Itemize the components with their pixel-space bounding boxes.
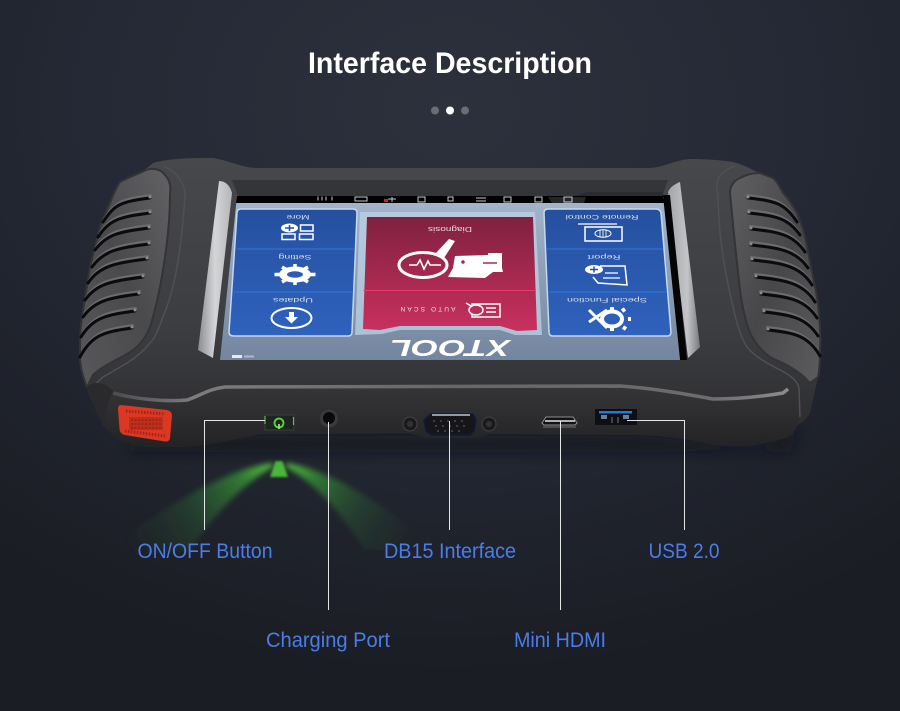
label: Mini HDMI: Mini HDMI [514, 629, 606, 652]
icon: updates: Updates [272, 296, 313, 303]
icon: setting: Setting [278, 253, 312, 260]
DB15 port [424, 414, 476, 435]
center red panel [355, 212, 542, 335]
charging port [320, 410, 338, 428]
right blue panel [544, 209, 671, 336]
top bezel [232, 180, 668, 196]
label: Charging Port: Charging Port [266, 629, 390, 652]
left grip ribs [80, 195, 152, 357]
left silver bezel [198, 181, 232, 358]
battery status [232, 355, 254, 358]
label: ON/OFF Button: ON/OFF Button [138, 540, 272, 563]
status bar [236, 192, 664, 203]
icon: remote control: Remote Control [565, 213, 638, 220]
red power bumper [118, 405, 172, 442]
icon: auto scan [466, 303, 500, 317]
text: diagnosis: Diagnosis [427, 225, 472, 232]
label: DB15 Interface: DB15 Interface [384, 540, 516, 563]
icon: diagnosis [399, 239, 503, 278]
screw left [403, 417, 417, 431]
mini HDMI port [542, 417, 577, 427]
pagination dots [431, 106, 469, 114]
right grip groove [717, 166, 800, 417]
title: Interface Description [308, 47, 592, 80]
left lower corner [87, 383, 113, 430]
device body [80, 158, 820, 447]
leader line: DB15 [448, 421, 450, 530]
USB port [595, 409, 637, 425]
icon: more: More [286, 213, 310, 220]
green light glow [90, 461, 445, 560]
device shadow [130, 425, 800, 452]
left grip groove [90, 166, 185, 393]
front edge highlight [113, 386, 788, 401]
device: XTOOL tablet [80, 158, 820, 452]
leader line: USB [627, 420, 684, 530]
text: auto scan: AUTO SCAN [400, 305, 456, 312]
power button [265, 415, 294, 430]
screen [220, 192, 687, 361]
right grip [730, 173, 820, 383]
label: USB 2.0: USB 2.0 [648, 540, 720, 563]
front face with ports [106, 388, 799, 447]
leader line: mini HDMI [560, 421, 562, 610]
icon: report: Report [587, 253, 620, 260]
leader line: charging [328, 422, 330, 610]
screw right [482, 417, 496, 431]
leader line: ON/OFF [204, 420, 265, 530]
icon: special function: Special Function [566, 296, 647, 303]
right grip ribs [746, 195, 820, 356]
right silver bezel [668, 182, 700, 358]
left blue panel [229, 209, 357, 336]
XTOOL logo: XTOOL [390, 335, 513, 361]
left grip [80, 169, 170, 387]
